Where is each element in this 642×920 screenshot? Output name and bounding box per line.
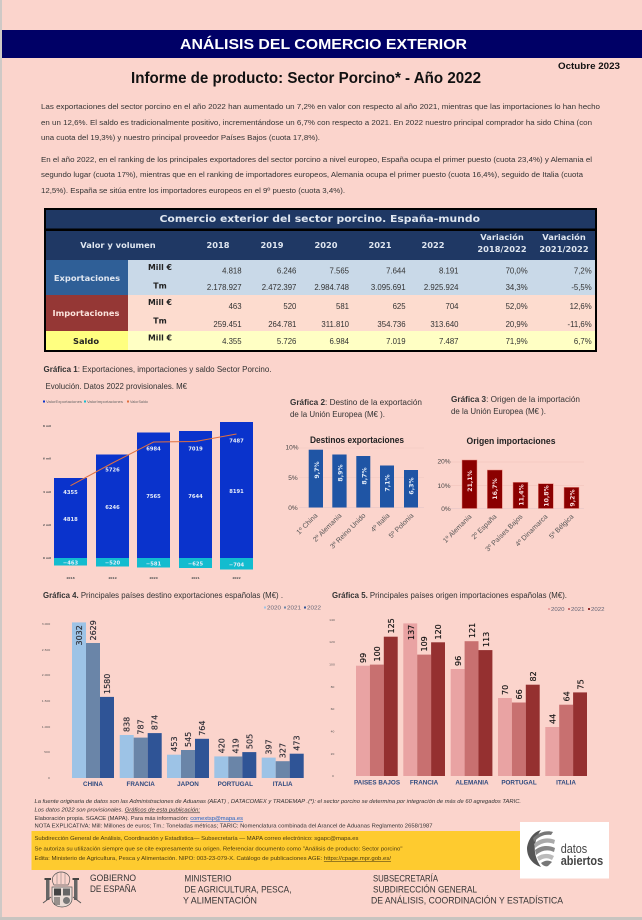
- chart 5: principales origenes: 60: [331, 707, 334, 711]
- table: comercio exterior: 52,0%: [506, 302, 528, 311]
- chart 1: exportaciones, importaciones y saldo: 8 mil: [43, 424, 51, 428]
- table: comercio exterior: 2018: [206, 240, 230, 250]
- chart 4: principales destinos: 2021: [287, 606, 301, 612]
- chart 1: exportaciones, importaciones y saldo: ValorSaldo: [130, 400, 148, 404]
- chart 3: origen importaciones: 20%: [437, 458, 451, 466]
- chart 5: principales origenes: 113: [482, 632, 491, 647]
- intro text: 12,5%). España se sitúa entre los importadores europeos en el 9º puesto (cuota 3,4%).: [41, 186, 345, 195]
- title banner: [2, 30, 642, 58]
- table: comercio exterior: 6.984: [329, 337, 350, 346]
- text: subsecretaria: SUBDIRECCIÓN GENERAL: [373, 884, 477, 894]
- chart 1: exportaciones, importaciones y saldo: 7565: [146, 494, 161, 500]
- source notes: La fuente originaria de datos son las Administraciones de Aduanas (AEAT) , DATACOMEX y TRADEMAP .(*): el sector porcino se determina por integración de más de 60 agregados TARIC.: [34, 799, 521, 805]
- chart 1: exportaciones, importaciones y saldo: 2019: [108, 576, 117, 580]
- chart 5: principales origenes: FRANCIA: [410, 780, 439, 786]
- chart 2: destinos exportaciones: 2º Alemania: [312, 512, 343, 544]
- chart 2: destinos exportaciones: [285, 435, 424, 551]
- intro text: segundo lugar (cuota 17%), mientras que en el ranking de importadores europeos, Alemania ocupa el primer puesto (cuota 16,4%), seguido de Italia (cuota: [41, 170, 584, 179]
- table: comercio exterior: 311.810: [321, 320, 350, 329]
- chart 4: principales destinos: JAPON: [177, 781, 199, 788]
- chart 4: principales destinos: 545: [184, 732, 193, 747]
- contact band: Subdirección General de Análisis, Coordinación y Estadística— Subsecretaría — MAPA correo electrónico: sgapc@mapa.es: [34, 836, 359, 842]
- text: ministerio: MINISTERIO: [184, 874, 232, 884]
- chart 5: principales origenes: [329, 607, 604, 786]
- chart 1: exportaciones, importaciones y saldo: −520: [105, 560, 120, 566]
- logo: datos abiertos: datos: [561, 841, 588, 856]
- table: comercio exterior: 7,2%: [574, 266, 592, 276]
- table: comercio exterior: 6,7%: [574, 337, 592, 346]
- chart 5: principales origenes: 100: [329, 662, 335, 666]
- chart 5: principales origenes: 80: [331, 685, 334, 689]
- chart 2: destinos exportaciones: 1º China: [296, 512, 319, 536]
- contact band: [32, 831, 522, 870]
- chart 1: exportaciones, importaciones y saldo: 7019: [188, 446, 203, 452]
- chart 4: principales destinos: 2.000: [42, 673, 50, 677]
- chart 4: principales destinos: 453: [170, 736, 179, 752]
- chart 1: exportaciones, importaciones y saldo: 6984: [146, 446, 161, 452]
- table: comercio exterior: Tm: [153, 282, 167, 290]
- table: comercio exterior: 2020: [314, 240, 338, 250]
- chart 1: exportaciones, importaciones y saldo: 4 mil: [43, 490, 51, 494]
- chart 2: destinos exportaciones: 8,9%: [337, 464, 344, 482]
- source notes: Los datos 2022 son provisionales. Gráficos de esta publicación:: [34, 808, 200, 814]
- chart 1: exportaciones, importaciones y saldo: 4355: [63, 490, 78, 496]
- chart 4: principales destinos: 787: [137, 719, 146, 735]
- chart 5: principales origenes: 82: [529, 671, 538, 682]
- chart 1: exportaciones, importaciones y saldo: 8191: [229, 489, 244, 495]
- chart 4: principales destinos: 500: [44, 750, 50, 754]
- chart 2: destinos exportaciones: 5%: [288, 475, 298, 482]
- chart 2: destinos exportaciones: 10%: [285, 444, 299, 452]
- table: comercio exterior: 8.191: [439, 266, 458, 276]
- chart 2: destinos exportaciones: 0%: [288, 505, 298, 512]
- chart 3: origen importaciones: 9,2%: [569, 489, 576, 507]
- table: comercio exterior: -11,6%: [568, 320, 592, 329]
- table: comercio exterior: 581: [336, 302, 349, 311]
- chart 1: exportaciones, importaciones y saldo: 0 mil: [43, 556, 51, 560]
- text: subsecretaria: SUBSECRETARÍA: [373, 874, 438, 884]
- chart 3: origen importaciones: 1º Alemania: [442, 513, 473, 545]
- table: comercio exterior: 20,9%: [506, 320, 528, 329]
- chart 3: origen importaciones: [437, 436, 584, 553]
- table: comercio exterior: 313.640: [430, 320, 459, 329]
- chart 5: principales origenes: 20: [331, 752, 334, 756]
- chart 1: exportaciones, importaciones y saldo: 2018: [66, 576, 75, 580]
- table: comercio exterior: 7.487: [439, 337, 458, 346]
- chart 4: principales destinos: 764: [198, 721, 207, 736]
- chart 1: exportaciones, importaciones y saldo: [43, 400, 253, 580]
- text: ministerio: DE AGRICULTURA, PESCA,: [184, 884, 292, 894]
- text: gobierno de espana: [90, 873, 136, 894]
- chart 4: principales destinos: 874: [151, 715, 160, 730]
- chart 4: principales destinos: 2.500: [42, 648, 50, 652]
- table: comercio exterior: 463: [229, 302, 242, 311]
- heading: grafica 3: [451, 395, 580, 416]
- chart 5: principales origenes: 137: [407, 625, 416, 640]
- chart 3: origen importaciones: 3º Países Bajos: [485, 513, 525, 553]
- text: subsecretaria: DE ANÁLISIS, COORDINACIÓN Y ESTADÍSTICA: [371, 896, 563, 906]
- chart 2: destinos exportaciones: 6,3%: [408, 477, 415, 495]
- source notes: NOTA EXPLICATIVA: Mill: Millones de euros; Tm.: Toneladas métricas; TARIC: Nomenclatura combinada del Arancel de Aduanas Reglamento 2658/1987: [34, 824, 432, 830]
- heading: grafica 2: de la Unión Europea (M€ ).: [290, 410, 385, 419]
- table: comercio exterior: 70,0%: [506, 266, 528, 276]
- chart 1: exportaciones, importaciones y saldo: 2022: [232, 576, 241, 580]
- chart 1: exportaciones, importaciones y saldo: 2 mil: [43, 523, 51, 527]
- table: comercio exterior: 2.925.924: [424, 283, 459, 292]
- text: subsecretaria: [371, 874, 563, 906]
- chart 5: principales origenes: 66: [515, 689, 524, 700]
- chart 5: principales origenes: 125: [387, 618, 396, 634]
- chart 4: principales destinos: 1.000: [42, 725, 50, 729]
- contact band: Se autoriza su utilización siempre que se cite expresamente su origen. Referenciar documento como "Análisis de producto: Sector porcino": [34, 846, 403, 852]
- table: comercio exterior: 2018/2022: [477, 244, 527, 254]
- heading: grafica 4: Gráfica 4. Principales países destino exportaciones españolas (M€) .: [43, 591, 283, 600]
- chart 5: principales origenes: 2021: [571, 607, 584, 613]
- table: comercio exterior: -5,5%: [571, 283, 592, 292]
- heading: grafica 3: Gráfica 3: Origen de la importación: [451, 395, 580, 404]
- chart 4: principales destinos: 3.000: [42, 622, 50, 626]
- text: gobierno de espana: DE ESPAÑA: [90, 884, 136, 894]
- chart 5: principales origenes: 120: [329, 640, 335, 644]
- chart 5: principales origenes: 70: [501, 685, 510, 695]
- table: comercio exterior: 7.644: [386, 266, 406, 276]
- table: comercio exterior: 7.565: [329, 266, 350, 276]
- chart 1: exportaciones, importaciones y saldo: 2021: [191, 576, 200, 580]
- chart 1: exportaciones, importaciones y saldo: ValorExportaciones: [46, 400, 83, 404]
- chart 3: origen importaciones: Origen importaciones: [466, 436, 556, 446]
- chart 1: exportaciones, importaciones y saldo: −463: [63, 560, 78, 566]
- chart 1: exportaciones, importaciones y saldo: 5726: [105, 468, 120, 474]
- chart 2: destinos exportaciones: 7,1%: [384, 474, 391, 492]
- chart 4: principales destinos: 505: [245, 734, 254, 749]
- chart 2: destinos exportaciones: 5º Polonia: [388, 512, 415, 540]
- table: comercio exterior: 2.178.927: [207, 283, 242, 292]
- table: comercio exterior: 3.095.691: [371, 283, 406, 292]
- chart 1: exportaciones, importaciones y saldo: −581: [146, 562, 161, 568]
- chart 5: principales origenes: 75: [576, 679, 586, 690]
- text: gobierno de espana: GOBIERNO: [90, 873, 136, 883]
- table: comercio exterior: 34,3%: [506, 283, 528, 292]
- table: comercio exterior: 6.246: [277, 266, 296, 276]
- chart 4: principales destinos: 3032: [75, 625, 84, 646]
- chart 5: principales origenes: 96: [454, 656, 463, 666]
- table: comercio exterior: 2021: [368, 240, 392, 250]
- chart 3: origen importaciones: 5º Bélgica: [548, 513, 575, 541]
- table: comercio exterior: 264.781: [268, 320, 296, 329]
- heading: grafica 1: [44, 365, 272, 391]
- table: comercio exterior: 4.355: [222, 337, 242, 346]
- chart 2: destinos exportaciones: 3º Reino Unido: [329, 512, 367, 551]
- chart 4: principales destinos: FRANCIA: [127, 781, 155, 788]
- intro text: en un 12,6%. El saldo es tradicionalmente positivo, incrementándose un 6,7% con respecto a 2021. En 2022 nuestro principal comprador ha sido China (con: [41, 118, 592, 127]
- chart 5: principales origenes: 140: [329, 618, 335, 622]
- intro text: En el año 2022, en el ranking de los principales exportadores del sector porcino a nivel europeo, España ocupa el primer puesto (cuota 23,4%) y Alemania el: [41, 155, 592, 164]
- chart 1: exportaciones, importaciones y saldo: 6246: [105, 505, 120, 511]
- table: comercio exterior: Valor y volumen: [80, 240, 156, 250]
- table: comercio exterior: [44, 208, 597, 352]
- title banner: ANÁLISIS DEL COMERCIO EXTERIOR: [180, 36, 467, 53]
- chart 2: destinos exportaciones: 8,7%: [361, 467, 368, 485]
- chart 5: principales origenes: 99: [359, 653, 368, 663]
- chart 5: principales origenes: 64: [562, 691, 572, 702]
- intro text: Las exportaciones del sector porcino en el año 2022 han aumentado un 7,2% en valor con respecto al año 2021, mientras que las importaciones lo han hecho: [41, 102, 600, 111]
- table: comercio exterior: 5.726: [277, 337, 296, 346]
- heading: grafica 5: Gráfica 5. Principales países origen importaciones españolas (M€).: [332, 591, 567, 600]
- chart 5: principales origenes: 2020: [551, 607, 564, 613]
- icon: coat of arms: [43, 872, 81, 907]
- chart 4: principales destinos: 420: [217, 738, 226, 753]
- table: comercio exterior: 2.984.748: [314, 283, 349, 292]
- chart 5: principales origenes: PAISES BAJOS: [354, 780, 400, 786]
- chart 3: origen importaciones: 2º España: [471, 513, 498, 541]
- text: ministerio: Y ALIMENTACIÓN: [183, 896, 257, 906]
- table: comercio exterior: Mill €: [148, 298, 172, 307]
- chart 5: principales origenes: 2022: [591, 607, 604, 613]
- logo: datos abiertos: abiertos: [561, 853, 603, 868]
- table: comercio exterior: Importaciones: [53, 308, 120, 318]
- table: comercio exterior: Exportaciones: [54, 273, 120, 283]
- contact band: Edita: Ministerio de Agricultura, Pesca y Alimentación. NIPO: 003-23-079-X. Catálogo de publicaciones AGE: https://cpage.mpr.gob.es/: [34, 856, 391, 862]
- table: comercio exterior: Comercio exterior del sector porcino. España-mundo: [160, 214, 480, 225]
- chart 3: origen importaciones: 10,8%: [543, 485, 550, 507]
- chart 4: principales destinos: 397: [265, 739, 274, 755]
- chart 4: principales destinos: 2022: [307, 606, 321, 612]
- chart 1: exportaciones, importaciones y saldo: 4818: [63, 517, 78, 523]
- chart 1: exportaciones, importaciones y saldo: 7487: [229, 438, 244, 444]
- chart 5: principales origenes: 109: [420, 636, 429, 652]
- chart 4: principales destinos: 1580: [103, 674, 112, 694]
- date: Octubre 2023: [558, 61, 620, 72]
- table: comercio exterior: Tm: [153, 316, 167, 326]
- chart 3: origen importaciones: 4º Dinamarca: [515, 513, 549, 548]
- chart 2: destinos exportaciones: 9,7%: [314, 461, 321, 479]
- table: comercio exterior: Variación: [480, 232, 524, 242]
- table: comercio exterior: 704: [445, 302, 459, 311]
- chart 1: exportaciones, importaciones y saldo: 7644: [188, 494, 203, 500]
- chart 4: principales destinos: CHINA: [83, 781, 103, 788]
- chart 5: principales origenes: 121: [468, 623, 477, 638]
- chart 3: origen importaciones: 0%: [441, 506, 451, 513]
- table: comercio exterior: 354.736: [377, 320, 406, 329]
- chart 4: principales destinos: [42, 606, 321, 788]
- table: comercio exterior: 2021/2022: [539, 244, 589, 254]
- intro text: [41, 102, 600, 195]
- chart 4: principales destinos: 419: [231, 738, 240, 754]
- table: comercio exterior: Variación: [542, 232, 586, 242]
- chart 2: destinos exportaciones: Destinos exportaciones: [310, 435, 404, 445]
- heading: grafica 2: Gráfica 2: Destino de la exportación: [290, 398, 422, 407]
- chart 3: origen importaciones: 16,7%: [492, 478, 499, 500]
- chart 4: principales destinos: 2020: [267, 606, 281, 612]
- chart 3: origen importaciones: 21,1%: [467, 470, 474, 492]
- table: comercio exterior: 2.472.397: [262, 283, 296, 292]
- chart 1: exportaciones, importaciones y saldo: ValorImportaciones: [87, 400, 124, 404]
- chart 5: principales origenes: 100: [373, 646, 382, 662]
- chart 4: principales destinos: 2629: [89, 620, 98, 640]
- chart 4: principales destinos: 0: [48, 776, 50, 780]
- table: comercio exterior: 520: [283, 302, 297, 311]
- table: comercio exterior: Mill €: [148, 263, 172, 272]
- table: comercio exterior: 7.019: [386, 337, 406, 346]
- heading: grafica 2: [290, 398, 422, 419]
- table: comercio exterior: Mill €: [148, 334, 172, 342]
- heading: grafica 1: Gráfica 1: Exportaciones, importaciones y saldo Sector Porcino.: [44, 365, 272, 374]
- chart 4: principales destinos: PORTUGAL: [218, 781, 253, 788]
- chart 1: exportaciones, importaciones y saldo: −625: [188, 562, 203, 568]
- subtitle: Informe de producto: Sector Porcino* - Año 2022: [131, 70, 481, 87]
- chart 5: principales origenes: 120: [434, 624, 443, 640]
- logo: datos abiertos: [520, 822, 609, 878]
- chart 3: origen importaciones: 11,4%: [518, 484, 525, 506]
- text: ministerio: [183, 874, 292, 906]
- table: comercio exterior: 625: [393, 302, 406, 311]
- chart 5: principales origenes: ITALIA: [556, 780, 576, 786]
- chart 4: principales destinos: 327: [279, 743, 288, 758]
- chart 3: origen importaciones: 10%: [437, 483, 451, 490]
- table: comercio exterior: Saldo: [73, 336, 99, 346]
- table: comercio exterior: 4.818: [222, 266, 242, 276]
- intro text: una cuota del 19,3%) y nuestro principal proveedor Países Bajos (cuota 17,8%).: [41, 133, 320, 142]
- chart 2: destinos exportaciones: 4º Italia: [370, 512, 391, 534]
- source notes: [34, 799, 521, 830]
- heading: grafica 1: Evolución. Datos 2022 provisionales. M€: [46, 382, 188, 391]
- chart 4: principales destinos: ITALIA: [273, 781, 293, 788]
- table: comercio exterior: 2019: [260, 240, 284, 250]
- chart 1: exportaciones, importaciones y saldo: 2020: [149, 576, 158, 580]
- chart 4: principales destinos: 1.500: [42, 699, 50, 703]
- chart 4: principales destinos: 473: [293, 735, 302, 751]
- chart 1: exportaciones, importaciones y saldo: 6 mil: [43, 456, 51, 460]
- table: comercio exterior: 2022: [421, 240, 445, 250]
- chart 1: exportaciones, importaciones y saldo: −704: [229, 562, 244, 568]
- chart 5: principales origenes: 0: [332, 774, 334, 778]
- chart 5: principales origenes: PORTUGAL: [501, 780, 537, 786]
- chart 5: principales origenes: 40: [331, 730, 334, 734]
- table: comercio exterior: 259.451: [213, 320, 242, 329]
- source notes: Elaboración propia. SGACE (MAPA). Para más información: comextsp@mapa.es: [34, 816, 243, 822]
- heading: grafica 3: de la Unión Europea (M€ ).: [451, 407, 546, 416]
- table: comercio exterior: 12,6%: [570, 302, 592, 311]
- chart 5: principales origenes: ALEMANIA: [455, 780, 489, 786]
- chart 4: principales destinos: 838: [123, 717, 132, 732]
- chart 5: principales origenes: 44: [548, 714, 558, 724]
- table: comercio exterior: 71,9%: [506, 337, 528, 346]
